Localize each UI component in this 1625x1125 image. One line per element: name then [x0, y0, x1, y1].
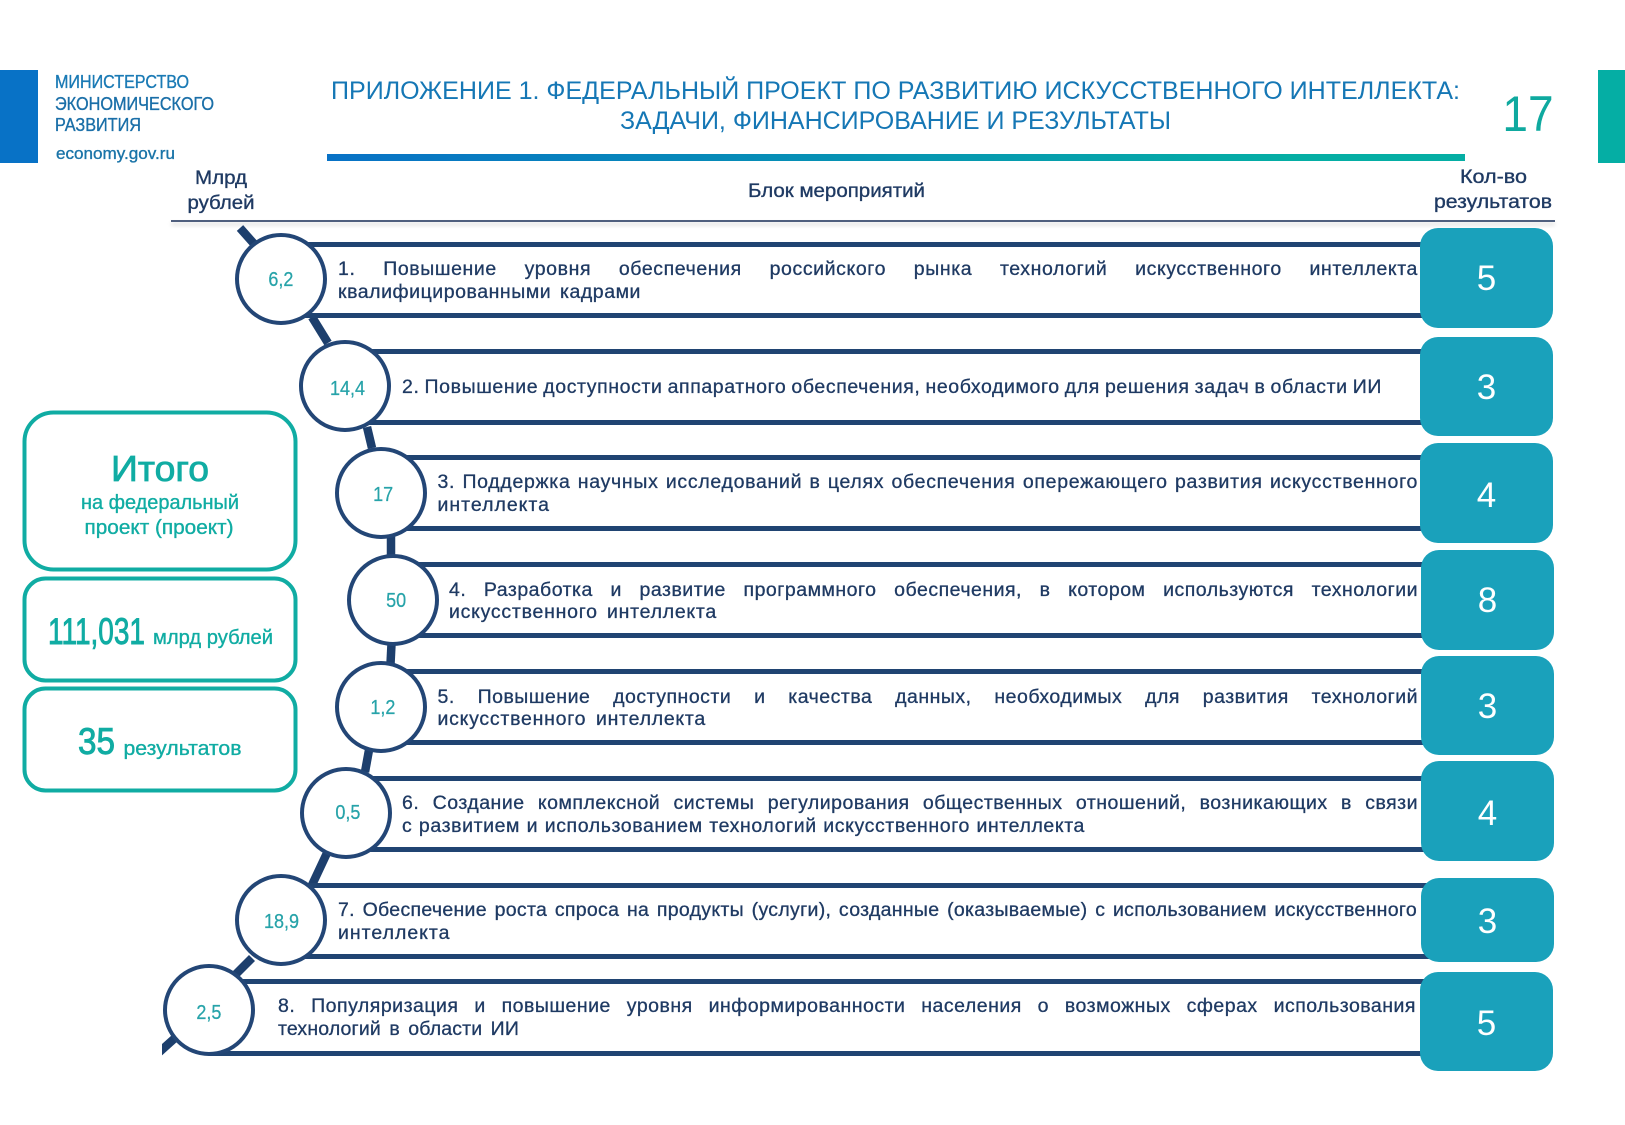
value circle 8: [163, 964, 255, 1056]
title gradient rule: [327, 154, 1465, 161]
left blue bar: [0, 70, 38, 163]
panel: total results: 35: [78, 721, 115, 762]
text 1: 1. Повышение уровня обеспечения российского рынка технологий искусственного интеллекта: [338, 258, 1418, 280]
text 4: 4. Разработка и развитие программного обеспечения, в котором используются технологии: [449, 578, 1418, 600]
result box 4: [1421, 550, 1554, 650]
title: ПРИЛОЖЕНИЕ 1. ФЕДЕРАЛЬНЫЙ ПРОЕКТ ПО РАЗВИТИЮ ИСКУССТВЕННОГО ИНТЕЛЛЕКТА:: [331, 75, 1460, 105]
value circle 7: [235, 874, 327, 966]
logo: ministry name and site: РАЗВИТИЯ: [55, 115, 141, 135]
result box 2: [1420, 337, 1553, 436]
value circle 3: 17: [373, 484, 393, 506]
text 3: интеллекта: [438, 494, 550, 516]
row 7: [235, 874, 1554, 966]
table header: результатов: [1434, 191, 1552, 213]
result box 5: 3: [1478, 686, 1497, 726]
panel: total funding: 111,031: [48, 611, 145, 652]
text 1: квалифицированными кадрами: [338, 281, 641, 303]
title: ЗАДАЧИ, ФИНАНСИРОВАНИЕ И РЕЗУЛЬТАТЫ: [620, 107, 1171, 135]
header rule: [171, 220, 1555, 222]
row 6: [300, 761, 1554, 861]
text 6: [402, 792, 1418, 837]
row 4: [347, 550, 1554, 650]
value circle 5: 1,2: [370, 696, 396, 718]
text 5: 5. Повышение доступности и качества данных, необходимых для развития технологий: [438, 686, 1418, 708]
table header: Кол-во: [1460, 166, 1527, 188]
page number: 17: [1502, 86, 1554, 142]
result box 5: [1421, 656, 1554, 755]
panel: total heading: проект (проект): [84, 516, 233, 539]
panel: total results: [22, 686, 298, 792]
text 8: [278, 995, 1416, 1040]
panel: total funding: [22, 576, 298, 682]
row 3: [335, 443, 1553, 543]
result box 6: [1421, 761, 1554, 861]
panel: total results: результатов: [124, 737, 242, 760]
text 4: [449, 578, 1418, 623]
connector line linking the circles: [162, 225, 396, 1056]
value circle 6: 0,5: [335, 802, 361, 824]
text 6: с развитием и использованием технологий искусственного интеллекта: [402, 815, 1085, 837]
value circle 1: [235, 233, 327, 325]
value circle 3: [335, 447, 427, 539]
panel: total funding: млрд рублей: [153, 626, 273, 649]
result box 6: 4: [1478, 794, 1497, 833]
row 2: [299, 337, 1553, 436]
logo: ministry name and site: [55, 72, 214, 163]
text 1: [338, 258, 1418, 303]
text 6: 6. Создание комплексной системы регулирования общественных отношений, возникающих в связи: [402, 792, 1418, 814]
text 5: искусственного интеллекта: [438, 708, 706, 730]
result box 1: [1420, 228, 1553, 328]
panel: total heading: на федеральный: [81, 491, 239, 514]
result box 7: [1421, 878, 1554, 962]
text 2: 2. Повышение доступности аппаратного обеспечения, необходимого для решения задач в области ИИ: [402, 376, 1382, 398]
text 8: 8. Популяризация и повышение уровня информированности населения о возможных сферах использования: [278, 995, 1416, 1017]
table header: [188, 166, 1552, 214]
text 3: [438, 471, 1418, 516]
row 1: [235, 228, 1553, 328]
text 5: [438, 686, 1418, 730]
result box 8: [1420, 972, 1553, 1071]
panel: total heading: Итого: [111, 448, 209, 489]
value circle 6: [300, 767, 392, 859]
logo: ministry name and site: МИНИСТЕРСТВО: [55, 72, 189, 92]
text 7: 7. Обеспечение роста спроса на продукты (услуги), созданные (оказываемые) с использованием искусственного: [338, 898, 1417, 920]
row 5: [335, 656, 1554, 755]
text 4: искусственного интеллекта: [449, 601, 717, 623]
result box 1: 5: [1477, 259, 1496, 298]
result box 7: 3: [1478, 902, 1497, 941]
value circle 4: [346, 554, 438, 646]
value circle 4: 50: [386, 590, 406, 612]
value circle 1: 6,2: [268, 268, 294, 290]
table header: Млрд: [195, 167, 248, 189]
logo: ministry name and site: economy.gov.ru: [56, 144, 175, 163]
panel: total heading: [22, 410, 298, 572]
text 7: интеллекта: [338, 922, 450, 944]
title: [331, 75, 1460, 135]
result box 3: [1420, 443, 1553, 543]
table header: рублей: [188, 192, 254, 214]
right teal bar: [1598, 70, 1625, 163]
value circle 2: 14,4: [329, 378, 365, 400]
row 8: [163, 964, 1553, 1071]
text 7: [338, 898, 1417, 944]
text 8: технологий в области ИИ: [278, 1018, 519, 1040]
value circle 2: [299, 340, 391, 432]
table header: Блок мероприятий: [748, 180, 925, 202]
value circle 5: [335, 661, 427, 753]
text 3: 3. Поддержка научных исследований в целях обеспечения опережающего развития искусственного: [438, 471, 1418, 493]
result box 3: 4: [1477, 476, 1496, 515]
value circle 8: 2,5: [196, 1002, 222, 1024]
result box 8: 5: [1477, 1004, 1496, 1042]
result box 2: 3: [1477, 368, 1496, 406]
result box 4: 8: [1478, 581, 1497, 620]
value circle 7: 18,9: [263, 910, 299, 932]
